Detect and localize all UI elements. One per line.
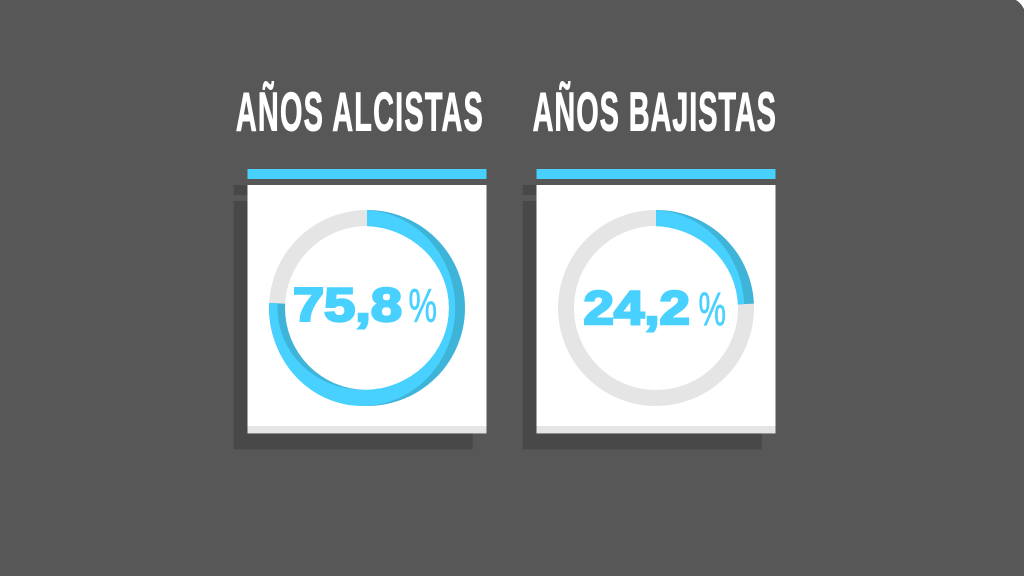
top bar xyxy=(248,169,486,179)
panel: años bajistas xyxy=(523,169,776,449)
donut chart: 75,8% xyxy=(269,210,465,406)
panel: años alcistas xyxy=(234,169,486,449)
corner notch xyxy=(1016,0,1024,9)
value: 75,8% xyxy=(293,278,437,332)
card xyxy=(248,185,486,433)
title: años alcistas: AÑOS ALCISTAS xyxy=(236,81,483,143)
value: 24,2% xyxy=(584,281,726,335)
donut chart: 24,2% xyxy=(558,210,754,406)
card shadow xyxy=(523,185,762,449)
card shadow xyxy=(234,185,473,449)
value: 75,8%: % xyxy=(408,278,437,332)
value: 75,8%: 75,8 xyxy=(293,278,402,331)
value: 24,2%: 24,2 xyxy=(584,281,690,334)
card xyxy=(536,185,776,433)
top bar xyxy=(536,169,776,179)
value: 24,2%: % xyxy=(698,282,726,335)
title: años bajistas: AÑOS BAJISTAS xyxy=(533,81,776,143)
